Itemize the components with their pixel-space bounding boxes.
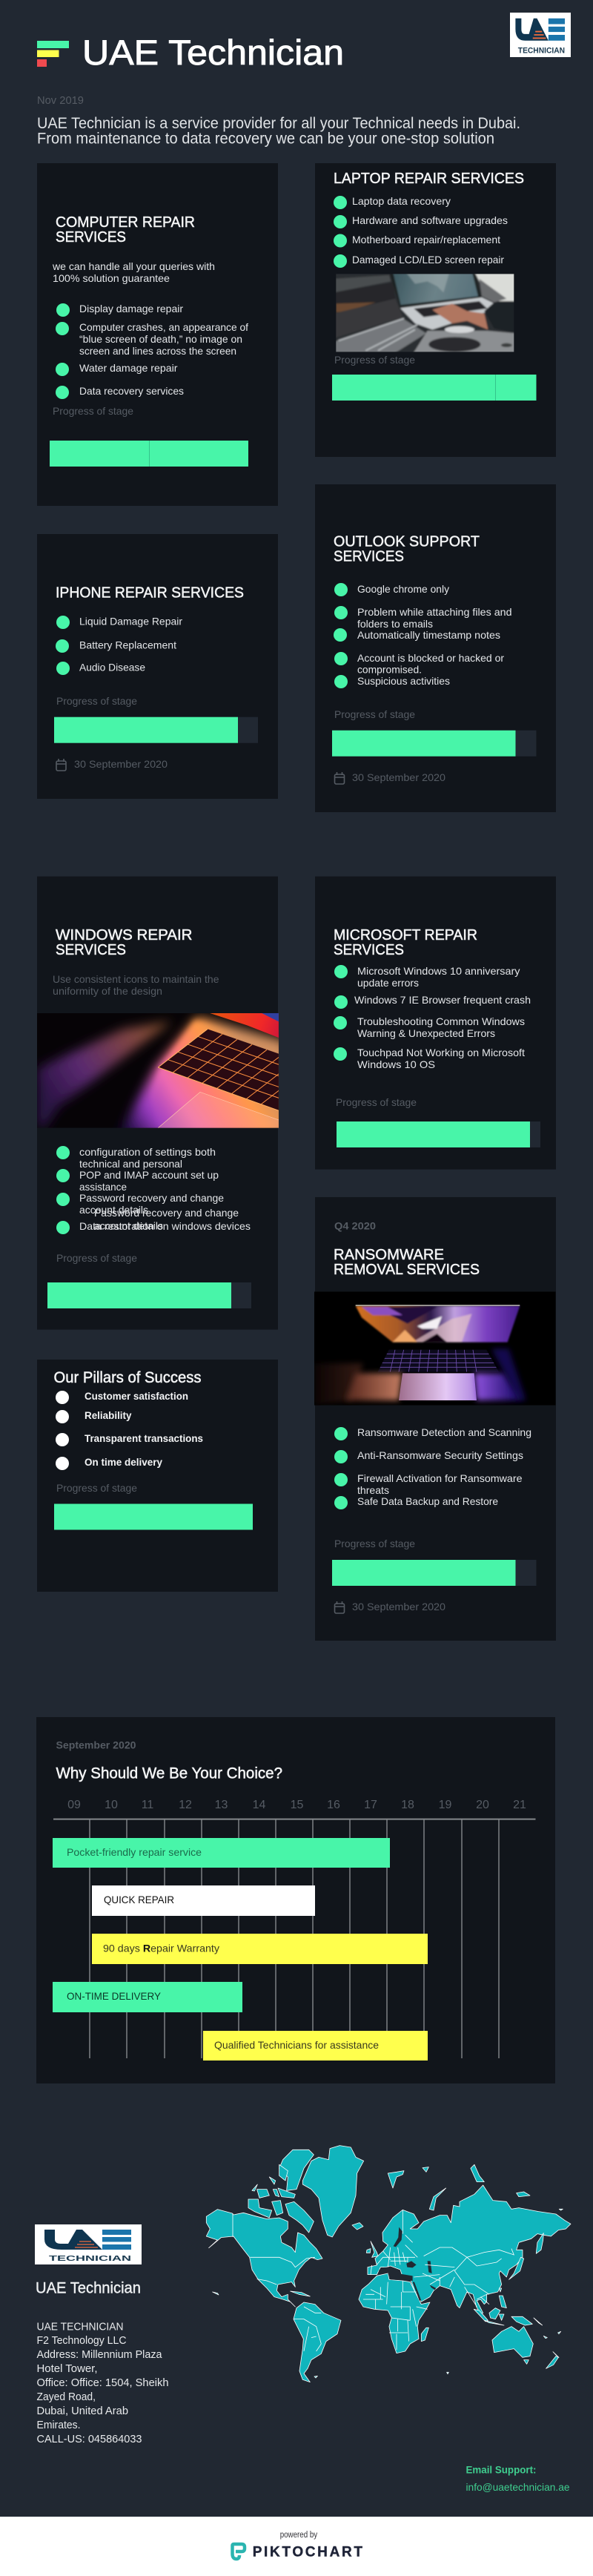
bar: qualified technicians	[203, 2031, 428, 2061]
bullet list: pillars: Transparent transactions	[85, 1433, 203, 1444]
heading: outlook support: OUTLOOK SUPPORT	[334, 533, 480, 550]
bullet list: laptop repair: Laptop data recovery	[352, 195, 451, 207]
contact address: Zayed Road,	[37, 2391, 96, 2403]
bullet list: microsoft repair	[334, 965, 531, 1070]
bullet list: iphone repair	[56, 616, 182, 675]
bullet list: iphone repair: Battery Replacement	[79, 639, 176, 651]
contact address: UAE TECHNICIAN	[37, 2322, 123, 2333]
heading: ransomware removal	[334, 1246, 480, 1278]
heading: computer repair: SERVICES	[56, 228, 126, 246]
photo: glowing laptop keyboard	[37, 1013, 279, 1128]
bullet list: pillars: Reliability	[85, 1410, 132, 1421]
icon: calendar	[335, 772, 344, 784]
chart axis labels: 14	[253, 1799, 265, 1811]
bullet list: outlook support	[334, 583, 511, 688]
bar: pocket-friendly repair service	[53, 1838, 390, 1868]
photo: laptop in the dark	[314, 1291, 556, 1406]
date: 30 September 2020	[352, 1601, 445, 1613]
bullet list: computer repair: Data recovery services	[79, 385, 184, 397]
chart axis labels: 15	[291, 1799, 304, 1811]
bullet list: windows repair: account details	[79, 1204, 148, 1216]
bullet list: pillars: Customer satisfaction	[85, 1391, 188, 1402]
progress label: Progress of stage	[334, 708, 415, 720]
heading: outlook support: SERVICES	[334, 548, 404, 565]
heading: ransomware removal: RANSOMWARE	[334, 1246, 444, 1263]
bullet list: pillars	[56, 1391, 203, 1470]
icon: calendar	[56, 759, 66, 771]
bullet list: windows repair: technical and personal	[79, 1158, 182, 1170]
chart axis labels: 21	[513, 1799, 526, 1811]
intro text: UAE Technician is a service provider for all your Technical needs in Dubai.	[37, 115, 520, 132]
heading: computer repair	[56, 214, 195, 246]
panel: iphone repair services	[37, 534, 278, 799]
panel: our pillars of success	[37, 1360, 278, 1592]
bullet list: microsoft repair: Warning & Unexpected Errors	[357, 1027, 495, 1039]
panel: computer repair services	[37, 163, 278, 506]
bullet list: iphone repair: Liquid Damage Repair	[79, 616, 182, 627]
bullet list: computer repair: Water damage repair	[79, 362, 178, 374]
bullet list: laptop repair: Damaged LCD/LED screen repair	[352, 254, 504, 266]
chart axis labels: 17	[364, 1799, 377, 1811]
bullet list: outlook support: Account is blocked or hacked or	[357, 652, 504, 664]
chart date: September 2020	[56, 1739, 136, 1750]
progress bar	[54, 1504, 253, 1529]
bar: qualified technicians: Qualified Technicians for assistance	[214, 2039, 379, 2051]
chart title: Why Should We Be Your Choice?	[56, 1765, 282, 1782]
logo: UAE Technician top right: TECHNICIAN	[518, 45, 565, 55]
chart axis labels: 19	[439, 1799, 452, 1811]
bullet list: ransomware: Firewall Activation for Ransomware	[357, 1472, 523, 1484]
panel: outlook support services	[315, 484, 556, 812]
progress bar	[337, 1121, 540, 1147]
progress bar	[332, 1560, 537, 1586]
progress label: Progress of stage	[53, 405, 133, 417]
icon: calendar	[335, 1601, 344, 1613]
bullet list: microsoft repair: Windows 7 IE Browser frequent crash	[354, 994, 531, 1006]
bar: quick repair	[92, 1885, 315, 1916]
bullet list: outlook support: compromised.	[357, 664, 422, 676]
title: UAE Technician	[82, 33, 344, 72]
heading: windows repair: SERVICES	[56, 941, 126, 958]
progress bar	[332, 375, 537, 401]
heading: windows repair	[56, 926, 193, 958]
bullet list: computer repair	[56, 303, 248, 399]
bullet list: windows repair: assistance	[79, 1181, 127, 1193]
contact address: Office: Office: 1504, Sheikh	[37, 2377, 169, 2389]
heading: laptop repair: LAPTOP REPAIR SERVICES	[334, 170, 524, 187]
panel: windows repair services	[37, 877, 279, 1329]
bullet list: laptop repair: Hardware and software upgrades	[352, 214, 508, 226]
panel: microsoft repair services	[315, 877, 556, 1170]
piktochart wordmark: PIKTOCHART	[253, 2545, 362, 2560]
bullet list: laptop repair: Motherboard repair/replacement	[352, 234, 500, 246]
intro text	[37, 115, 520, 147]
footer: powered by piktochart	[0, 2517, 593, 2576]
subtitle: uniformity of the design	[53, 985, 162, 997]
subtitle	[53, 973, 219, 997]
bar: 90 days repair warranty: 90 days Repair Warranty	[103, 1942, 219, 1954]
header icon: coloured bars	[37, 41, 69, 67]
contact address: Address: Millennium Plaza	[37, 2349, 162, 2361]
bullet list: outlook support: Automatically timestamp notes	[357, 629, 500, 641]
bullet list: ransomware: Anti-Ransomware Security Settings	[357, 1449, 523, 1461]
bullet list: microsoft repair: update errors	[357, 977, 419, 989]
progress label: Progress of stage	[56, 695, 137, 707]
world map	[206, 2146, 571, 2382]
bullet list: outlook support: Suspicious activities	[357, 675, 450, 687]
bullet list: outlook support: Google chrome only	[357, 583, 449, 595]
bullet list: windows repair: POP and IMAP account set up	[79, 1169, 219, 1181]
chart axis labels: 18	[401, 1799, 414, 1811]
logo: UAE Technician footer	[35, 2224, 142, 2264]
heading: pillars: Our Pillars of Success	[53, 1369, 202, 1386]
heading: ransomware removal: REMOVAL SERVICES	[334, 1261, 480, 1278]
date: 30 September 2020	[74, 758, 168, 770]
bullet list: iphone repair: Audio Disease	[79, 662, 145, 673]
bullet list: ransomware: Ransomware Detection and Scanning	[357, 1426, 531, 1438]
bar: quick repair: QUICK REPAIR	[104, 1894, 174, 1905]
bullet list: computer repair: Computer crashes, an appearance of	[79, 321, 248, 333]
chart axis labels: 11	[142, 1799, 153, 1811]
bullet list: windows repair: Data restoration on windows devices	[79, 1220, 251, 1232]
progress bar	[332, 731, 537, 757]
heading: computer repair: COMPUTER REPAIR	[56, 214, 195, 231]
bullet list: computer repair: Display damage repair	[79, 303, 183, 314]
email support: info@uaetechnician.ae	[466, 2481, 570, 2493]
chart axis labels: 16	[327, 1799, 340, 1811]
bar: pocket-friendly repair service: Pocket-friendly repair service	[67, 1846, 202, 1858]
subtitle: Use consistent icons to maintain the	[53, 973, 219, 985]
contact address	[37, 2322, 169, 2445]
heading: microsoft repair	[334, 926, 477, 958]
contact address: Emirates.	[37, 2419, 80, 2431]
icon: piktochart logo	[233, 2544, 245, 2559]
panel: ransomware removal services	[314, 1197, 556, 1641]
bullet list: windows repair: configuration of settings both	[79, 1146, 216, 1158]
intro text: From maintenance to data recovery we can be your one-stop solution	[37, 130, 494, 147]
email support	[466, 2464, 570, 2493]
email support: Email Support:	[466, 2464, 537, 2476]
chart axis labels: 20	[476, 1799, 489, 1811]
heading: outlook support	[334, 533, 480, 565]
bullet list: computer repair: “blue screen of death,” no image on	[79, 333, 242, 345]
logo: UAE Technician top right	[510, 13, 571, 57]
intro text: computer repair: 100% solution guarantee	[53, 272, 170, 284]
chart axis labels	[67, 1799, 526, 1811]
contact address: Hotel Tower,	[37, 2363, 98, 2375]
heading: microsoft repair: MICROSOFT REPAIR	[334, 926, 477, 943]
bullet list: microsoft repair: Touchpad Not Working on Microsoft	[357, 1047, 525, 1058]
bullet list: laptop repair	[334, 195, 508, 268]
bullet list: outlook support: folders to emails	[357, 618, 433, 630]
chart axis labels: 13	[215, 1799, 228, 1811]
bullet list: outlook support: Problem while attaching files and	[357, 606, 511, 618]
bullet list: computer repair: screen and lines across the screen	[79, 345, 236, 357]
panel: why should we be your choice chart	[36, 1717, 555, 2083]
contact address: F2 Technology LLC	[37, 2335, 126, 2347]
contact address: Dubai, United Arab	[37, 2405, 128, 2417]
date: 30 September 2020	[352, 771, 445, 783]
logo: UAE Technician footer: TECHNICIAN	[49, 2254, 131, 2263]
chart axis labels: 12	[179, 1799, 192, 1811]
quarter label: Q4 2020	[334, 1220, 376, 1232]
photo: laptop on an engine	[334, 271, 517, 355]
bar: on-time delivery	[53, 1982, 242, 2012]
progress label: Progress of stage	[334, 354, 415, 366]
progress bar	[54, 717, 258, 743]
chart axis labels: 09	[67, 1799, 81, 1811]
intro text: computer repair: we can handle all your queries with	[52, 260, 215, 272]
bullet list: windows repair: Password recovery and change	[94, 1207, 239, 1219]
panel: laptop repair services	[315, 163, 556, 457]
bullet list: windows repair: account details	[94, 1219, 163, 1231]
bullet list: microsoft repair: Windows 10 OS	[357, 1058, 435, 1070]
bullet list: ransomware: threats	[357, 1484, 389, 1496]
heading: microsoft repair: SERVICES	[334, 941, 404, 958]
intro text: computer repair	[52, 260, 215, 284]
bullet list: windows repair	[56, 1146, 251, 1234]
progress label: Progress of stage	[336, 1096, 417, 1108]
progress bar	[47, 1282, 251, 1308]
bullet list: microsoft repair: Troubleshooting Common Windows	[357, 1015, 525, 1027]
progress label: Progress of stage	[334, 1538, 415, 1549]
bullet list: ransomware: Safe Data Backup and Restore	[357, 1495, 498, 1507]
bar: 90 days repair warranty	[92, 1934, 428, 1964]
progress bar	[50, 441, 248, 467]
company name: UAE Technician	[36, 2279, 141, 2296]
progress label: Progress of stage	[56, 1252, 137, 1264]
bullet list: microsoft repair: Microsoft Windows 10 anniversary	[357, 965, 520, 977]
contact address: CALL-US: 045864033	[37, 2434, 142, 2445]
date: Nov 2019	[37, 94, 84, 107]
bar: on-time delivery: ON-TIME DELIVERY	[67, 1990, 162, 2002]
chart axis labels: 10	[105, 1799, 118, 1811]
progress label: Progress of stage	[56, 1482, 137, 1494]
bullet list: windows repair: Password recovery and change	[79, 1192, 224, 1204]
heading: windows repair: WINDOWS REPAIR	[56, 926, 193, 943]
bullet list: ransomware	[334, 1426, 531, 1509]
heading: iphone repair: IPHONE REPAIR SERVICES	[56, 584, 244, 602]
bullet list: pillars: On time delivery	[85, 1457, 162, 1468]
powered by text: powered by	[280, 2531, 317, 2540]
